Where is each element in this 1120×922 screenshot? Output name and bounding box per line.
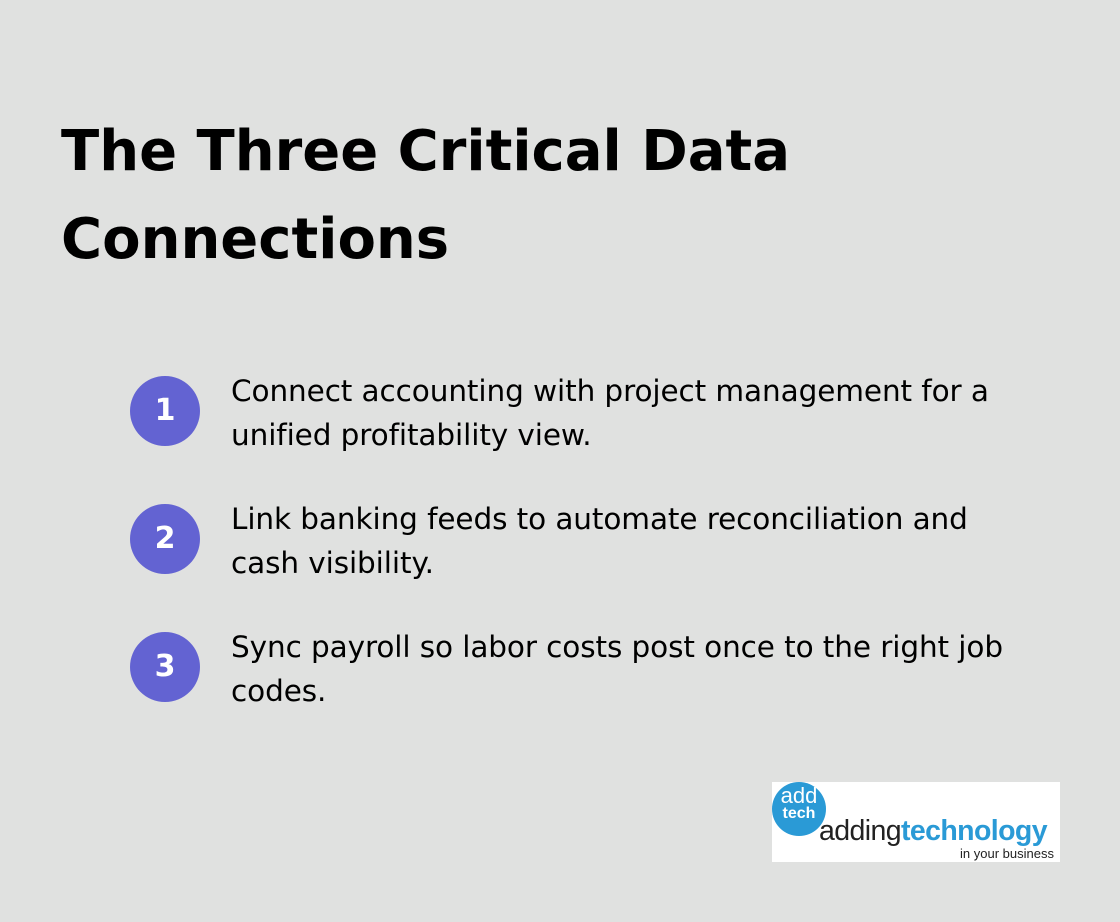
logo [772,782,1060,862]
item 3 text: Sync payroll so labor costs post once to the right job [231,630,1003,664]
title [61,119,790,272]
logo wordmark: addingtechnology [819,815,1047,847]
logo circle: add [781,783,817,808]
logo tagline: in your business [960,846,1054,861]
item 2 text: cash visibility. [231,546,434,580]
number badge 2 [130,504,200,574]
item 3 text [231,630,1003,708]
number badge 2: 2 [155,521,175,556]
item 3 [130,630,1003,708]
item 2 [130,502,968,580]
title: The Three Critical Data [61,119,790,184]
logo circle [772,782,826,836]
number badge 3 [130,632,200,702]
item 1 text: Connect accounting with project management for a [231,374,989,408]
logo circle: tech [783,805,815,822]
number badge 3: 3 [155,649,175,684]
item 2 text: Link banking feeds to automate reconciliation and [231,502,968,536]
number badge 1: 1 [155,393,175,428]
item 2 text [231,502,968,580]
item 1 [130,374,989,452]
item 3 text: codes. [231,674,326,708]
title: Connections [61,207,449,272]
number badge 1 [130,376,200,446]
item 1 text: unified profitability view. [231,418,592,452]
item 1 text [231,374,989,452]
